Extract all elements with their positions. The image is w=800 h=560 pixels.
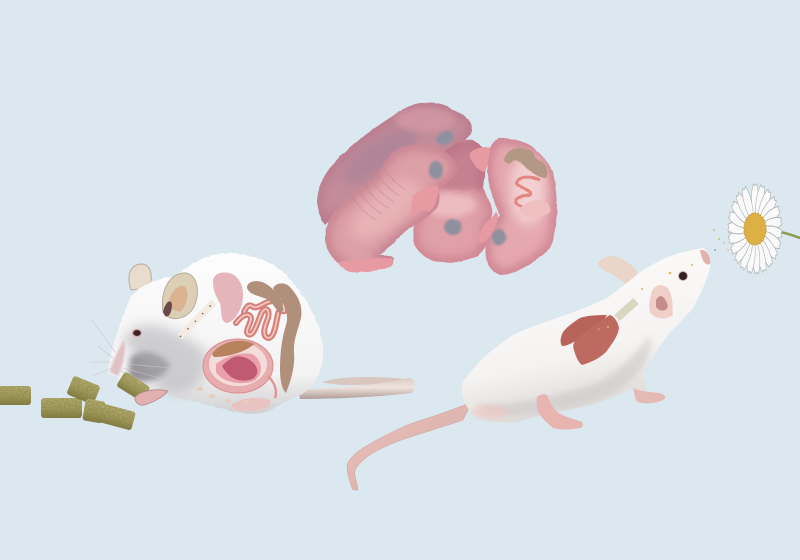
body xyxy=(462,248,710,423)
pup intestine xyxy=(516,177,540,212)
face shading xyxy=(110,325,208,393)
small intestine xyxy=(236,301,284,338)
pup colon xyxy=(504,148,547,178)
daisy flower xyxy=(728,184,800,274)
left lobe xyxy=(561,315,607,346)
amniotic sac xyxy=(209,342,267,386)
pellet: long xyxy=(41,398,82,418)
pellet: small xyxy=(82,398,106,424)
cecum xyxy=(247,281,283,314)
front paw xyxy=(135,390,168,405)
pup limbs xyxy=(337,147,498,272)
eye xyxy=(132,329,142,337)
uterus with fetus xyxy=(203,339,276,398)
stem xyxy=(775,231,800,238)
pellet: upper xyxy=(66,375,101,405)
esophagus xyxy=(180,302,214,337)
trachea xyxy=(617,301,636,318)
right mouse: sniffing flower xyxy=(347,248,710,490)
pollen cloud xyxy=(713,227,734,251)
placenta xyxy=(212,341,254,357)
cord xyxy=(268,376,276,398)
flower centre xyxy=(744,213,766,245)
front paw xyxy=(633,388,665,403)
front ear xyxy=(162,273,197,319)
pup stomach xyxy=(518,201,550,217)
pup: back left xyxy=(317,103,472,225)
body xyxy=(108,253,323,414)
tail xyxy=(298,377,415,399)
right lobe xyxy=(573,315,619,365)
pellet: far left xyxy=(0,386,31,405)
pup: front left xyxy=(325,145,457,272)
amniotic fluid xyxy=(216,353,261,383)
uterus wall xyxy=(203,339,273,393)
pup: lower middle xyxy=(413,140,493,263)
front ear xyxy=(649,285,673,318)
tail xyxy=(347,402,472,490)
hind leg xyxy=(537,394,583,430)
mammary glands xyxy=(197,387,250,404)
pups: group of newborns xyxy=(317,103,557,275)
back ear xyxy=(598,256,638,285)
pup organs xyxy=(504,148,550,217)
hind foot xyxy=(231,398,271,411)
colon xyxy=(273,283,301,393)
fetus xyxy=(222,356,257,381)
pellet in mouth xyxy=(116,371,150,402)
pollen dots on mouse xyxy=(598,264,693,330)
pup: right xyxy=(486,138,557,275)
back ear xyxy=(129,264,151,290)
petals xyxy=(728,184,782,274)
lung xyxy=(561,315,619,365)
pup eyes xyxy=(429,128,506,245)
whiskers xyxy=(90,320,170,388)
nose xyxy=(700,250,710,264)
pellet: right xyxy=(95,403,136,431)
left mouse: pregnant, eating xyxy=(90,253,415,414)
eye xyxy=(678,272,688,280)
sepal xyxy=(768,226,782,234)
rump blush xyxy=(472,405,508,419)
food pellets xyxy=(0,375,136,431)
stomach xyxy=(213,273,243,323)
illustration: mouse life cycle xyxy=(0,102,800,490)
body underside shading xyxy=(480,335,651,416)
